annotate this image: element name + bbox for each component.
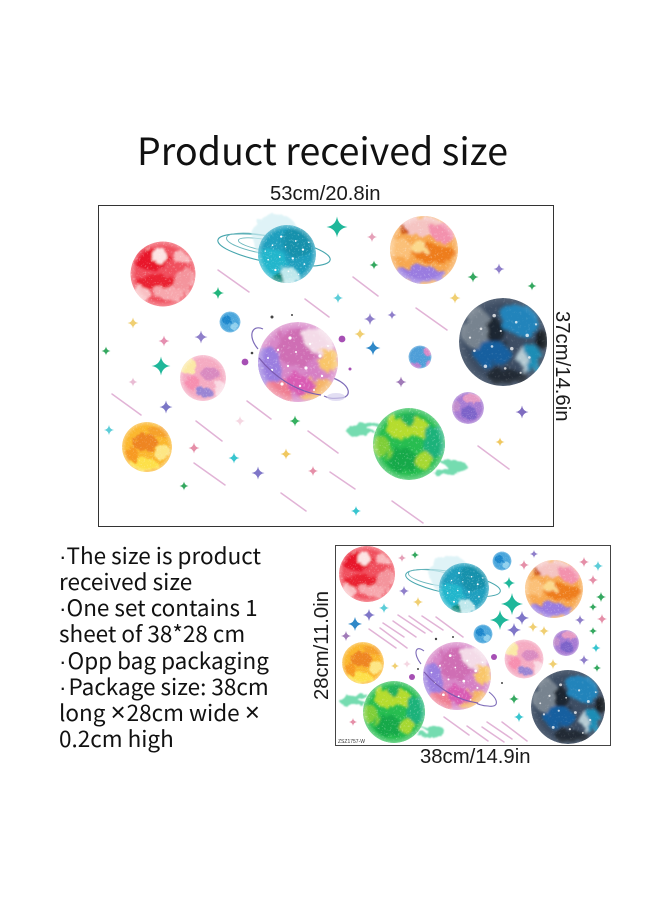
planet: pink — [178, 355, 226, 401]
planet: sunset orange — [524, 560, 583, 618]
stars — [102, 216, 536, 516]
text block: product details — [59, 539, 269, 754]
planet: green ringed — [347, 408, 467, 480]
text block: product details: ·Opp bag packaging — [59, 644, 269, 676]
planet: teal ringed — [404, 555, 502, 617]
planet: sunset orange — [389, 216, 458, 284]
planet: main purple ringed — [416, 642, 496, 710]
text block: product details: received size — [59, 565, 192, 597]
meteor streaks — [112, 270, 509, 523]
small dots — [409, 636, 503, 684]
planet: dark blue — [459, 298, 550, 386]
planet: small violet — [452, 392, 484, 424]
panel: sticker sheet layout — [336, 546, 610, 746]
planet: red — [339, 546, 395, 602]
sheet code: ZSZ1757-W — [338, 739, 365, 745]
planet: pink — [503, 640, 544, 678]
text block: product details: ·Package size: 38cm — [59, 670, 269, 702]
small dots — [242, 314, 352, 370]
planet: small blue — [474, 624, 492, 644]
planet: small blue — [220, 312, 240, 332]
planet: teal ringed — [216, 214, 332, 287]
planet: small blue pink — [407, 346, 433, 370]
text block: product details: ·The size is product — [59, 539, 261, 571]
planet: main purple ringed — [252, 322, 348, 402]
text block: product details: ·One set contains 1 — [59, 591, 258, 623]
planet: small violet — [553, 630, 579, 656]
panel: installed wall decal layout — [98, 206, 554, 526]
planet: orange — [342, 642, 384, 684]
text block: product details: 0.2cm high — [59, 722, 174, 754]
text block: product details: sheet of 38*28 cm — [59, 617, 245, 649]
meteor streaks — [369, 615, 527, 742]
planet: small blue top — [492, 552, 512, 570]
planet: orange — [122, 422, 172, 472]
height label: 37cm/14.6in: 37cm/14.6in — [551, 311, 573, 422]
width label: 53cm/20.8in: 53cm/20.8in — [270, 183, 380, 205]
stars — [341, 550, 607, 726]
width label: 38cm/14.9in: 38cm/14.9in — [420, 746, 530, 768]
text block: product details: long ×28cm wide × — [59, 696, 260, 728]
planet: red — [130, 242, 196, 306]
height label: 28cm/11.0in: 28cm/11.0in — [311, 591, 333, 700]
title: Product received size — [137, 121, 508, 176]
planet: green ringed — [340, 681, 445, 743]
planet: dark blue — [531, 670, 607, 744]
